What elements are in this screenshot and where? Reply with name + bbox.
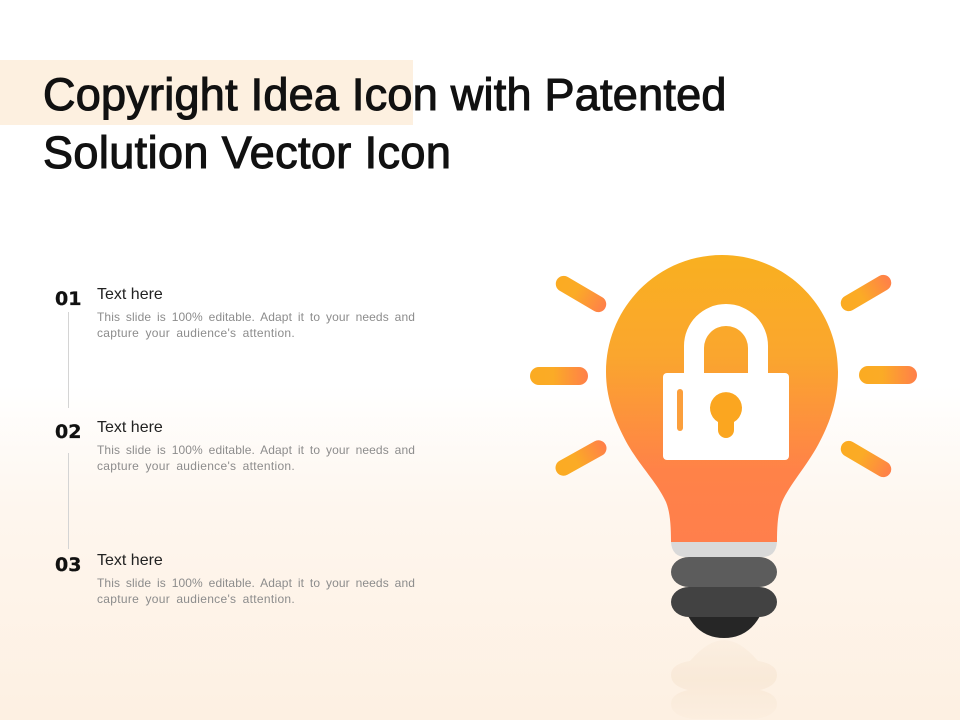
list item 01: This slide is 100% editable. Adapt it to your needs and bbox=[97, 310, 415, 324]
list item 02: 02 bbox=[55, 421, 81, 443]
list item 03: 03 bbox=[55, 554, 81, 576]
bulb glass bbox=[606, 255, 838, 542]
list item 01: capture your audience's attention. bbox=[97, 326, 295, 340]
bulb base bbox=[671, 542, 777, 638]
list item 01: 01 bbox=[55, 288, 81, 310]
list item 02: capture your audience's attention. bbox=[97, 459, 295, 473]
list item 02: Text here bbox=[97, 419, 163, 436]
rays bbox=[530, 272, 917, 480]
title: Copyright Idea Icon with Patented bbox=[43, 69, 727, 120]
list item 03: Text here bbox=[97, 552, 163, 569]
bulb reflection bbox=[671, 640, 777, 719]
icon: padlock bbox=[663, 304, 789, 460]
title highlight block bbox=[0, 60, 413, 125]
title: Solution Vector Icon bbox=[43, 127, 451, 178]
list item 02 bbox=[55, 419, 415, 549]
list item 02: This slide is 100% editable. Adapt it to your needs and bbox=[97, 443, 415, 457]
list item 01: Text here bbox=[97, 286, 163, 303]
list item 03: capture your audience's attention. bbox=[97, 592, 295, 606]
title bbox=[43, 69, 727, 178]
list item 01 bbox=[55, 286, 415, 408]
list item 03 bbox=[55, 552, 415, 606]
list item 03: This slide is 100% editable. Adapt it to your needs and bbox=[97, 576, 415, 590]
